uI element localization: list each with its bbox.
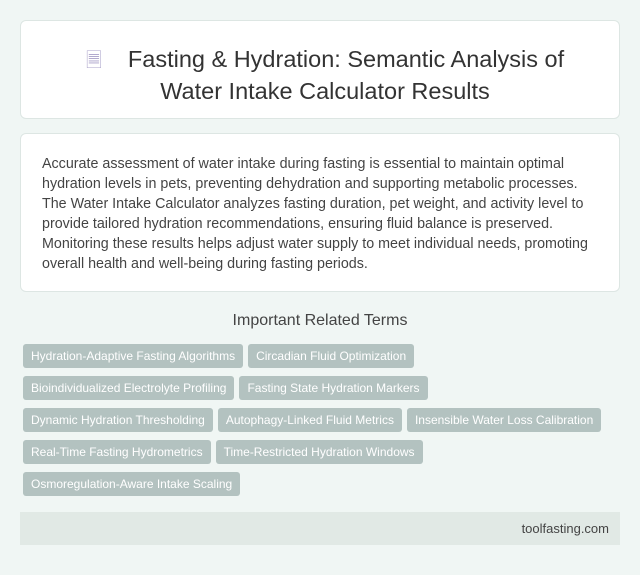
tag list	[23, 344, 601, 496]
tag list: Time-Restricted Hydration Windows	[224, 445, 415, 459]
title: Water Intake Calculator Results	[160, 78, 490, 104]
header card	[20, 20, 620, 119]
tag list: Fasting State Hydration Markers	[247, 381, 420, 395]
tag list: Dynamic Hydration Thresholding	[31, 413, 205, 427]
title: 🗏 Fasting & Hydration: Semantic Analysis of	[86, 46, 564, 72]
tag list: Real-Time Fasting Hydrometrics	[31, 445, 203, 459]
related terms heading: Important Related Terms	[233, 312, 407, 329]
tag list: Circadian Fluid Optimization	[256, 349, 406, 363]
tag list: Hydration-Adaptive Fasting Algorithms	[31, 349, 235, 363]
tag list: Bioindividualized Electrolyte Profiling	[31, 381, 226, 395]
tag list: Autophagy-Linked Fluid Metrics	[226, 413, 394, 427]
tag list: Osmoregulation-Aware Intake Scaling	[31, 477, 232, 491]
description text: Accurate assessment of water intake during fasting is essential to maintain optimal hydration levels in pets, preventing dehydration and supporting metabolic processes. The Water Intake Calculator analyzes fasting duration, pet weight, and activity level to provide tailored hydration recommendations, ensuring fluid balance is preserved. Monitoring these results helps adjust water supply to meet individual needs, promoting overall health and well-being during fasting periods.	[42, 156, 588, 272]
footer	[20, 512, 620, 545]
footer: toolfasting.com	[522, 521, 609, 536]
tag list: Insensible Water Loss Calibration	[415, 413, 593, 427]
description card	[20, 133, 620, 292]
title	[86, 46, 564, 104]
